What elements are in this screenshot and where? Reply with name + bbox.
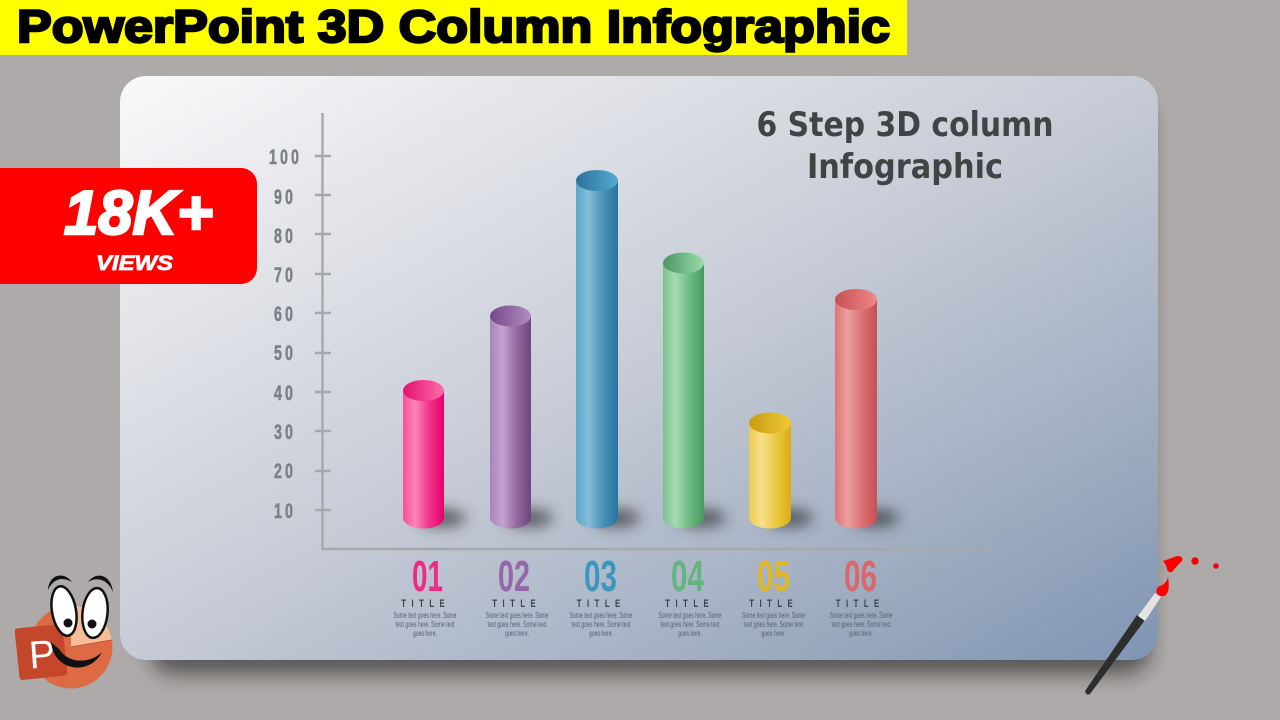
step 04 label: Some text goes here. Some (658, 611, 722, 620)
axis labels (269, 145, 302, 523)
column 4: green (663, 252, 726, 528)
step 05 label: text goes here. Some text (744, 620, 803, 629)
axis labels: 80 (274, 224, 296, 248)
heading: 6 step 3D column infographic (756, 105, 1054, 187)
step 03 label: TITLE (577, 598, 620, 610)
heading: 6 step 3D column infographic: 6 Step 3D column (756, 105, 1054, 145)
axis labels: 40 (274, 381, 296, 405)
step 02 label: Some text goes here. Some (486, 611, 549, 620)
column 2: purple (490, 306, 553, 528)
icon: paint brush with splashes (1085, 556, 1219, 695)
step 05 label: goes here. (762, 629, 786, 638)
step 02 label: 02 (498, 552, 530, 601)
step 02 label (486, 552, 549, 638)
step 05 label: 05 (757, 552, 790, 601)
step 05 label (742, 552, 805, 638)
axis labels: 60 (274, 302, 296, 326)
heading: 6 step 3D column infographic: Infographic (807, 147, 1003, 187)
step 04 label: TITLE (665, 598, 709, 610)
step 03 label: text goes here. Some text (572, 620, 631, 629)
axis labels: 20 (274, 459, 296, 483)
step 01 label: TITLE (401, 598, 445, 610)
step 01 label: text goes here. Some text (396, 620, 455, 629)
step 05 label: TITLE (749, 598, 793, 610)
column 1: pink (403, 380, 466, 528)
axis labels: 100 (269, 145, 302, 169)
chart axes (315, 113, 995, 549)
step 06 label: 06 (844, 552, 877, 601)
axis labels: 50 (274, 341, 296, 365)
column 5: yellow (749, 412, 813, 528)
step 01 label: goes here. (413, 629, 437, 638)
callout: 18K+ views badge: VIEWS (96, 252, 173, 275)
panel: background card (120, 76, 1158, 674)
step 01 label (394, 552, 457, 638)
step 04 label (658, 552, 722, 638)
step 06 label: goes here. (849, 629, 873, 638)
step 06 label (830, 552, 893, 638)
step 03 label (570, 552, 633, 638)
step 02 label: text goes here. Some text (488, 620, 547, 629)
icon: PowerPoint mascot: P (28, 633, 57, 678)
axis labels: 30 (274, 420, 296, 444)
axis labels: 90 (274, 185, 296, 209)
step 06 label: text goes here. Some text (832, 620, 891, 629)
step 03 label: 03 (584, 552, 617, 601)
icon: PowerPoint mascot (14, 575, 113, 688)
step 02 label: goes here. (505, 629, 529, 638)
step 05 label: Some text goes here. Some (742, 611, 805, 620)
callout: 18K+ views badge (0, 168, 257, 284)
step 03 label: goes here. (589, 629, 613, 638)
step 06 label: Some text goes here. Some (830, 611, 893, 620)
callout: 18K+ views badge: 18K+ (64, 179, 213, 248)
step 04 label: goes here. (678, 629, 702, 638)
step 01 label: Some text goes here. Some (394, 611, 457, 620)
title banner: PowerPoint 3D Column Infographic (17, 1, 890, 52)
step 01 label: 01 (412, 552, 443, 601)
step 06 label: TITLE (836, 598, 879, 610)
column 6: red (835, 289, 899, 528)
step 03 label: Some text goes here. Some (570, 611, 633, 620)
axis labels: 70 (274, 263, 296, 287)
step 02 label: TITLE (492, 598, 536, 610)
step 04 label: text goes here. Some text (660, 620, 720, 629)
step 04 label: 04 (671, 552, 704, 601)
column 3: blue (576, 170, 640, 528)
axis labels: 10 (274, 499, 296, 523)
